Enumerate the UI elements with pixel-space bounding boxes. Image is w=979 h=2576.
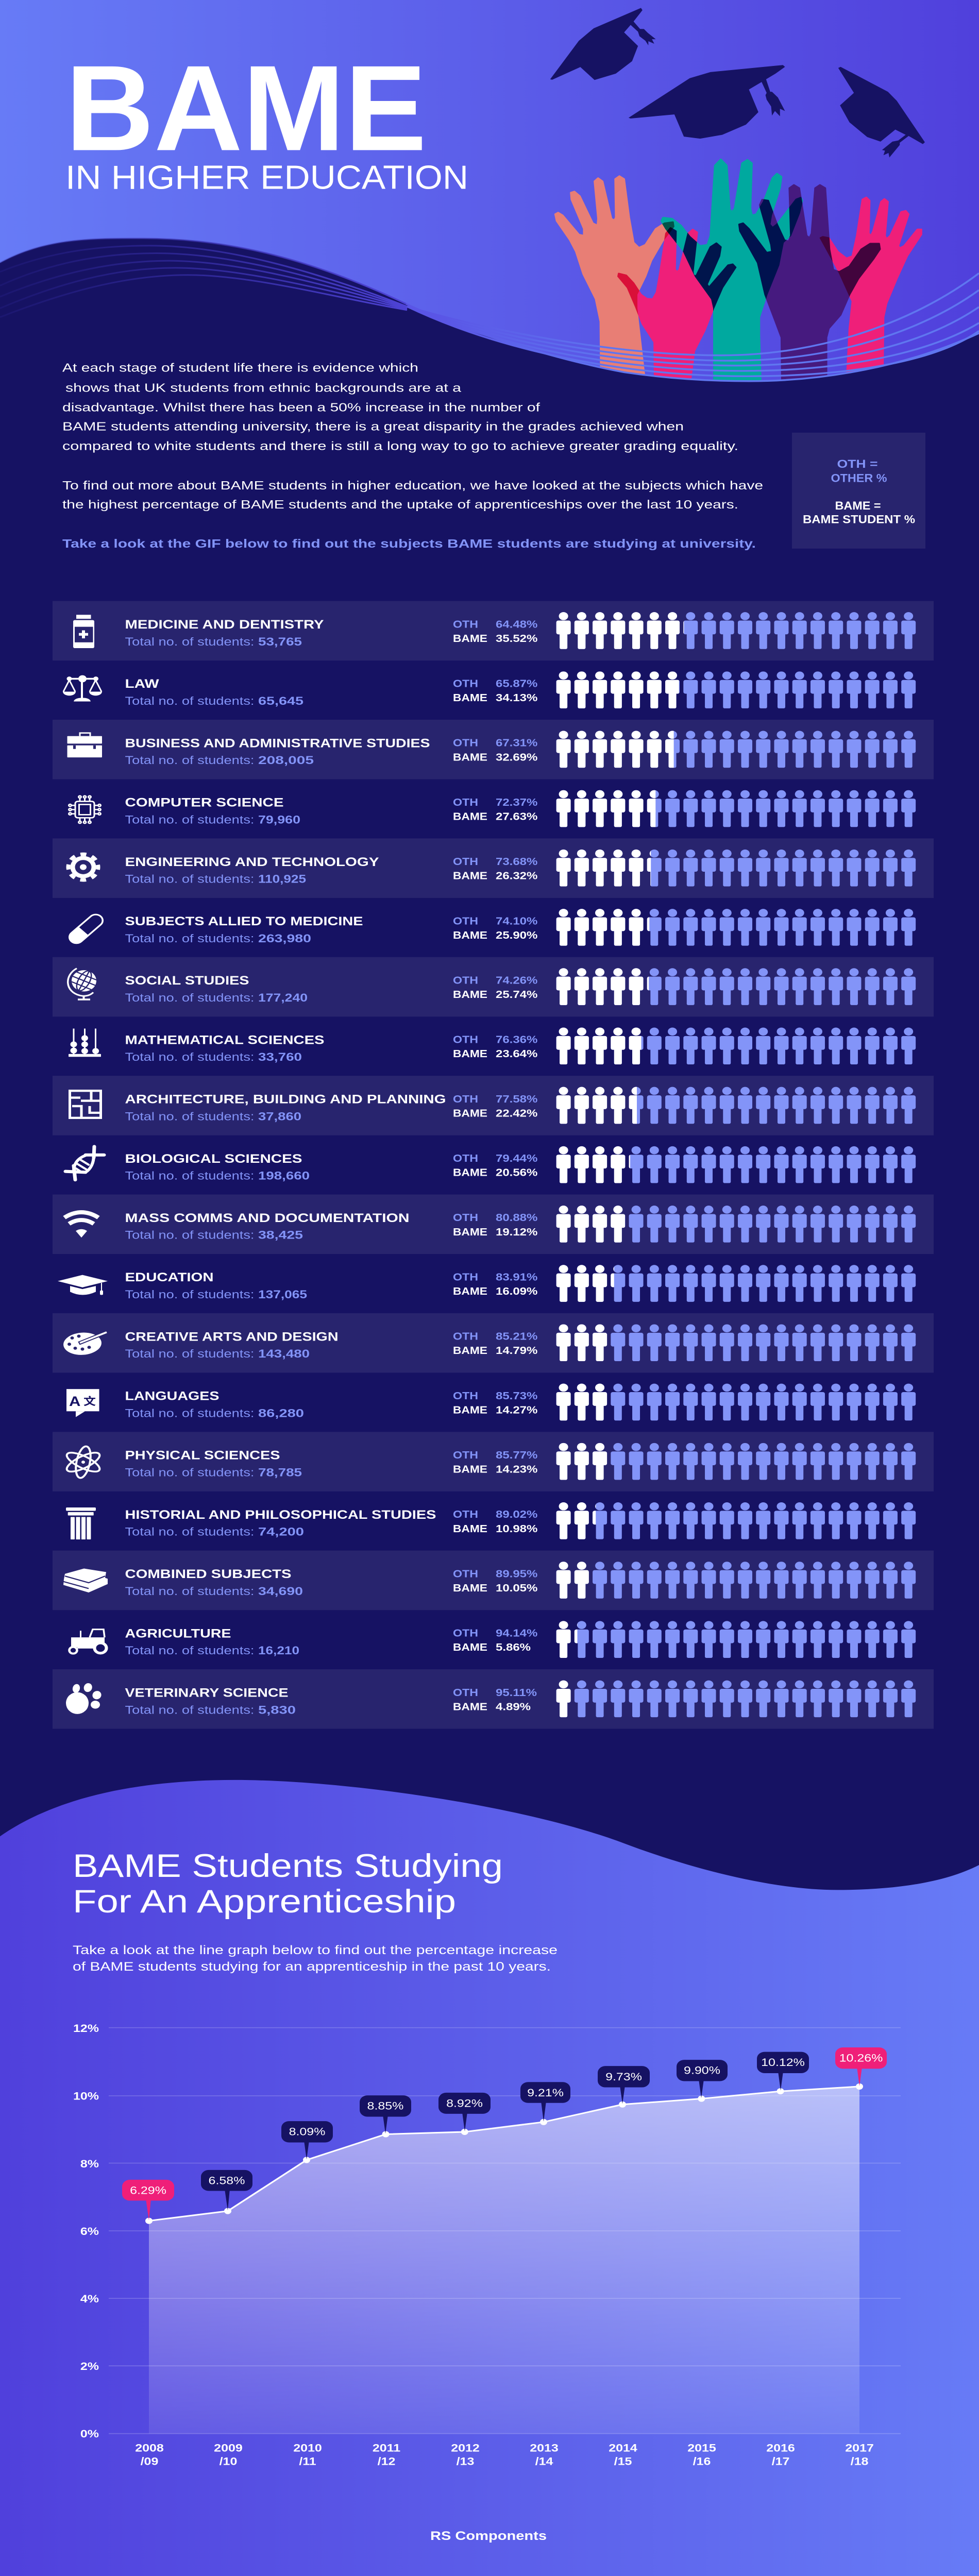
title: IN HIGHER EDUCATION [65, 159, 468, 196]
panel: biological sciences: Total no. of students: [125, 1170, 254, 1182]
panel: law: 65.87% [496, 677, 537, 689]
panel: architecture, building and planning: OTH [453, 1093, 478, 1105]
panel: engineering and technology: OTH [453, 856, 478, 868]
panel: creative arts and design [53, 1313, 934, 1372]
panel: computer science: 79,960 [258, 814, 300, 826]
people chart [556, 1146, 916, 1183]
callout 2009/10 [201, 2170, 252, 2210]
panel: computer science: 27.63% [496, 810, 537, 822]
panel: languages: 14.27% [496, 1404, 537, 1416]
legend panel: OTHER % [831, 472, 887, 485]
panel: education: 16.09% [496, 1285, 537, 1297]
panel: law: Total no. of students: [125, 695, 254, 708]
panel: mathematical sciences [69, 1027, 916, 1064]
panel: veterinary science: 4.89% [496, 1701, 531, 1713]
y axis labels: 10% [73, 2090, 99, 2102]
callout 2013/14 [520, 2082, 570, 2122]
people chart [556, 1087, 916, 1124]
panel: architecture, building and planning: Total no. of students: [125, 1110, 254, 1123]
panel: computer science: 72.37% [496, 796, 537, 808]
panel: mass comms and documentation: Total no. of students: [125, 1229, 254, 1242]
callout 2015/16 [677, 2060, 728, 2098]
y axis labels: 0% [80, 2428, 99, 2440]
panel: subjects allied to medicine: BAME [453, 929, 487, 941]
panel: physical sciences: 14.23% [496, 1463, 537, 1475]
panel: physical sciences: PHYSICAL SCIENCES [125, 1448, 280, 1462]
panel: mass comms and documentation: 38,425 [258, 1229, 303, 1242]
x axis labels: /14 [535, 2455, 553, 2467]
panel: social studies: 74.26% [496, 974, 537, 986]
panel: computer science: Total no. of students: [125, 814, 254, 826]
panel: business and administrative studies: 67.31% [496, 737, 537, 749]
panel: biological sciences [65, 1146, 916, 1183]
icon: graduation cap [58, 1275, 108, 1295]
panel: education: 137,065 [258, 1289, 307, 1301]
panel: medicine and dentistry [53, 601, 934, 660]
panel: biological sciences: BAME [453, 1166, 487, 1178]
panel: business and administrative studies: BUSINESS AND ADMINISTRATIVE STUDIES [125, 736, 430, 750]
icon: abacus [69, 1028, 101, 1057]
panel: medicine and dentistry: Total no. of students: [125, 635, 254, 648]
panel: subjects allied to medicine: 74.10% [496, 915, 537, 927]
panel: languages: 85.73% [496, 1389, 537, 1401]
source credit: RS Components [430, 2529, 547, 2543]
panel: creative arts and design: BAME [453, 1345, 487, 1357]
x axis labels: /15 [614, 2455, 632, 2467]
callout 2011/12 [360, 2095, 411, 2133]
panel: mass comms and documentation [53, 1195, 934, 1254]
panel: computer science: COMPUTER SCIENCE [125, 795, 283, 809]
y axis labels: 12% [73, 2022, 99, 2034]
people chart [556, 1443, 916, 1480]
panel: computer science [69, 790, 916, 827]
panel: business and administrative studies [53, 720, 934, 779]
people chart [556, 1027, 916, 1064]
x axis labels: 2008 [135, 2442, 164, 2454]
panel: agriculture: 16,210 [258, 1645, 299, 1657]
panel: creative arts and design: OTH [453, 1330, 478, 1342]
intro text: Take a look at the GIF below to find out the subjects BAME students are studying at university. [62, 537, 756, 551]
callout 2008/09 [122, 2180, 174, 2220]
panel: engineering and technology: 110,925 [258, 873, 306, 886]
legend panel: BAME STUDENT % [803, 513, 915, 526]
panel: historial and philosophical studies: OTH [453, 1509, 478, 1520]
panel: agriculture: Total no. of students: [125, 1645, 254, 1657]
callout 2015/16: 9.90% [684, 2064, 720, 2076]
panel: subjects allied to medicine: Total no. of students: [125, 932, 254, 945]
panel: engineering and technology [53, 838, 934, 898]
panel: agriculture: AGRICULTURE [125, 1626, 231, 1640]
panel: physical sciences: Total no. of students: [125, 1466, 254, 1479]
y axis labels: 4% [80, 2292, 99, 2304]
panel: mass comms and documentation: 80.88% [496, 1212, 537, 1224]
panel: veterinary science: Total no. of students: [125, 1704, 254, 1717]
x axis labels: 2017 [845, 2442, 874, 2454]
callout 2014/15: 9.73% [605, 2070, 642, 2082]
intro text: shows that UK students from ethnic backgrounds are at a [65, 381, 462, 395]
icon: medicine bottle [73, 615, 94, 648]
people chart [556, 731, 916, 768]
panel: agriculture: BAME [453, 1641, 487, 1653]
people chart [556, 850, 916, 886]
panel: architecture, building and planning [53, 1076, 934, 1136]
panel: languages: LANGUAGES [125, 1388, 219, 1403]
panel: mathematical sciences: 23.64% [496, 1048, 537, 1060]
panel: veterinary science: BAME [453, 1701, 487, 1713]
icon: paw print [66, 1683, 103, 1714]
section intro text: Take a look at the line graph below to find out the percentage increase [73, 1943, 558, 1957]
panel: computer science: OTH [453, 796, 478, 808]
x axis labels: /17 [772, 2455, 789, 2467]
panel: medicine and dentistry: 35.52% [496, 632, 537, 645]
panel: combined subjects: 34,690 [258, 1585, 303, 1598]
people chart [556, 1324, 916, 1361]
icon: raised hands [555, 159, 921, 385]
panel: agriculture: OTH [453, 1627, 478, 1639]
panel: subjects allied to medicine: SUBJECTS ALLIED TO MEDICINE [125, 914, 363, 928]
intro text: BAME students attending university, there is a great disparity in the grades achieved when [62, 420, 684, 433]
callout 2010/11: 8.09% [289, 2125, 325, 2138]
icon: globe [67, 967, 100, 1001]
panel: subjects allied to medicine: OTH [453, 915, 478, 927]
icon: translate bubble [66, 1389, 99, 1417]
panel: biological sciences: 198,660 [258, 1170, 310, 1182]
panel: languages: 86,280 [258, 1407, 304, 1420]
callout 2010/11 [281, 2121, 333, 2159]
panel: social studies: SOCIAL STUDIES [125, 973, 249, 988]
people chart [556, 1206, 916, 1243]
panel: social studies: 177,240 [258, 992, 308, 1004]
y axis labels: 6% [80, 2225, 99, 2237]
panel: social studies: Total no. of students: [125, 992, 254, 1004]
icon: column [66, 1507, 96, 1539]
panel: social studies [53, 957, 934, 1016]
people chart [556, 1562, 916, 1599]
panel: business and administrative studies: 32.69% [496, 751, 537, 763]
panel: engineering and technology: 73.68% [496, 856, 537, 868]
intro text: To find out more about BAME students in higher education, we have looked at the subjects which have [62, 479, 763, 493]
intro text: disadvantage. Whilst there has been a 50% increase in the number of [62, 401, 541, 414]
callout 2013/14: 9.21% [527, 2086, 564, 2098]
panel: creative arts and design: CREATIVE ARTS AND DESIGN [125, 1329, 338, 1344]
panel: engineering and technology: 26.32% [496, 870, 537, 882]
icon: translate bubble: A [69, 1394, 80, 1409]
panel: mass comms and documentation: OTH [453, 1212, 478, 1224]
panel: mass comms and documentation: 19.12% [496, 1226, 537, 1238]
x axis labels: 2015 [687, 2442, 716, 2454]
panel: agriculture: 94.14% [496, 1627, 537, 1639]
x axis labels: 2010 [293, 2442, 322, 2454]
icon: painter palette [62, 1331, 107, 1356]
panel: creative arts and design: 143,480 [258, 1348, 310, 1361]
panel: combined subjects: 10.05% [496, 1582, 537, 1594]
panel: mass comms and documentation: BAME [453, 1226, 487, 1238]
panel: education: BAME [453, 1285, 487, 1297]
panel: creative arts and design: 14.79% [496, 1345, 537, 1357]
panel: mathematical sciences: OTH [453, 1033, 478, 1045]
panel: historial and philosophical studies [66, 1502, 916, 1539]
panel: mathematical sciences: 76.36% [496, 1033, 537, 1045]
icon: capsule [65, 911, 106, 946]
icon: dna helix [65, 1146, 104, 1180]
panel: historial and philosophical studies: BAME [453, 1522, 487, 1534]
panel: mathematical sciences: BAME [453, 1048, 487, 1060]
title: BAME [65, 40, 427, 176]
panel: physical sciences: 78,785 [258, 1466, 302, 1479]
icon: briefcase [67, 733, 102, 757]
panel: creative arts and design: 85.21% [496, 1330, 537, 1342]
people chart [556, 671, 916, 708]
icon: floor plan maze [70, 1091, 102, 1118]
y axis labels: 8% [80, 2157, 99, 2170]
panel: historial and philosophical studies: 89.02% [496, 1509, 537, 1520]
panel: engineering and technology: BAME [453, 870, 487, 882]
panel: mathematical sciences: MATHEMATICAL SCIENCES [125, 1032, 325, 1047]
panel: engineering and technology: ENGINEERING AND TECHNOLOGY [125, 855, 379, 869]
panel: social studies: BAME [453, 989, 487, 1001]
panel: veterinary science: VETERINARY SCIENCE [125, 1685, 289, 1700]
panel: languages: Total no. of students: [125, 1407, 254, 1420]
apprenticeship section background wave [0, 1780, 979, 2576]
people chart [556, 1621, 916, 1658]
panel: architecture, building and planning: BAME [453, 1107, 487, 1119]
panel: biological sciences: OTH [453, 1153, 478, 1164]
x axis labels: 2012 [451, 2442, 480, 2454]
wave contour lines across the hands [406, 273, 979, 381]
panel: biological sciences: 79.44% [496, 1153, 537, 1164]
panel: medicine and dentistry: BAME [453, 632, 487, 645]
panel: biological sciences: 20.56% [496, 1166, 537, 1178]
x axis labels: /09 [141, 2455, 158, 2467]
callout 2012/13 [438, 2093, 491, 2131]
y axis labels: 2% [80, 2360, 99, 2372]
people chart [556, 1384, 916, 1420]
callout 2009/10: 6.58% [209, 2174, 245, 2187]
panel: mathematical sciences: Total no. of students: [125, 1051, 254, 1064]
x axis labels: /12 [378, 2455, 395, 2467]
panel: medicine and dentistry: OTH [453, 618, 478, 630]
panel: mass comms and documentation: MASS COMMS AND DOCUMENTATION [125, 1211, 409, 1225]
icon: scales [63, 675, 102, 701]
panel: veterinary science: OTH [453, 1686, 478, 1698]
intro text: At each stage of student life there is evidence which [62, 361, 418, 375]
panel: physical sciences: 85.77% [496, 1449, 537, 1461]
people chart [556, 790, 916, 827]
area under line [149, 2087, 859, 2434]
callout 2014/15 [598, 2066, 650, 2104]
panel: education: OTH [453, 1271, 478, 1283]
icon: gear [68, 854, 98, 880]
panel: law: LAW [125, 676, 159, 691]
legend panel: OTH = [837, 458, 877, 470]
legend panel: BAME = [835, 500, 881, 513]
callout 2016/17: 10.12% [761, 2056, 805, 2069]
x axis labels: /13 [457, 2455, 474, 2467]
panel: creative arts and design: Total no. of students: [125, 1348, 254, 1361]
icon: graduation caps [550, 8, 925, 158]
x axis labels: 2016 [766, 2442, 795, 2454]
section heading: For An Apprenticeship [73, 1884, 456, 1920]
panel: law: 34.13% [496, 692, 537, 704]
icon: microchip [69, 796, 101, 823]
panel: medicine and dentistry: 53,765 [258, 635, 302, 648]
panel: education [58, 1265, 916, 1302]
callout 2011/12: 8.85% [367, 2099, 403, 2112]
panel: historial and philosophical studies: 10.98% [496, 1522, 537, 1534]
people chart [556, 612, 916, 649]
intro text [62, 361, 763, 551]
panel: medicine and dentistry: 64.48% [496, 618, 537, 630]
x axis labels: /10 [220, 2455, 237, 2467]
panel: architecture, building and planning: 77.58% [496, 1093, 537, 1105]
panel: business and administrative studies: 208,005 [258, 754, 314, 767]
panel: medicine and dentistry: MEDICINE AND DENTISTRY [125, 617, 324, 632]
icon: atom [64, 1445, 103, 1479]
x axis labels: /18 [851, 2455, 868, 2467]
callout 2017/18 [835, 2047, 887, 2086]
panel: computer science: BAME [453, 810, 487, 822]
panel: veterinary science: 5,830 [258, 1704, 296, 1717]
panel: subjects allied to medicine: 263,980 [258, 932, 311, 945]
panel: agriculture [69, 1621, 916, 1658]
panel: social studies: 25.74% [496, 989, 537, 1001]
panel: social studies: OTH [453, 974, 478, 986]
section intro text: of BAME students studying for an apprenticeship in the past 10 years. [73, 1959, 551, 1973]
panel: physical sciences [53, 1432, 934, 1492]
panel: architecture, building and planning: 37,860 [258, 1110, 301, 1123]
panel: law: BAME [453, 692, 487, 704]
panel: education: 83.91% [496, 1271, 537, 1283]
line chart [73, 2022, 901, 2467]
panel: subjects allied to medicine: 25.90% [496, 929, 537, 941]
panel: biological sciences: BIOLOGICAL SCIENCES [125, 1151, 302, 1165]
intro text: the highest percentage of BAME students and the uptake of apprenticeships over the last 10 years. [62, 498, 738, 512]
panel: mathematical sciences: 33,760 [258, 1051, 302, 1064]
panel: business and administrative studies: BAME [453, 751, 487, 763]
section heading: BAME Students Studying [73, 1848, 503, 1884]
panel: languages: OTH [453, 1389, 478, 1401]
x axis labels: 2014 [609, 2442, 637, 2454]
panel: combined subjects: COMBINED SUBJECTS [125, 1567, 292, 1581]
panel: law [63, 671, 916, 708]
panel: agriculture: 5.86% [496, 1641, 531, 1653]
x axis labels: 2013 [530, 2442, 559, 2454]
x axis labels: /16 [693, 2455, 711, 2467]
panel: business and administrative studies: OTH [453, 737, 478, 749]
x axis labels: /11 [299, 2455, 316, 2467]
panel: education: Total no. of students: [125, 1289, 254, 1301]
panel: veterinary science [53, 1669, 934, 1729]
panel: education: EDUCATION [125, 1270, 213, 1284]
panel: languages: BAME [453, 1404, 487, 1416]
panel: historial and philosophical studies: Total no. of students: [125, 1526, 254, 1538]
icon: tractor [69, 1630, 106, 1654]
people chart [556, 968, 916, 1005]
panel: law: OTH [453, 677, 478, 689]
grid lines [109, 2028, 901, 2434]
people chart [556, 1681, 916, 1717]
panel: combined subjects [53, 1551, 934, 1610]
callout 2016/17 [757, 2052, 809, 2091]
hero navy wave [0, 239, 979, 488]
x axis labels: 2011 [373, 2442, 400, 2454]
panel: subjects allied to medicine [65, 909, 916, 946]
people chart [556, 909, 916, 946]
intro text: compared to white students and there is still a long way to go to achieve greater grading equality. [62, 439, 738, 453]
panel: veterinary science: 95.11% [496, 1686, 537, 1698]
panel: architecture, building and planning: ARCHITECTURE, BUILDING AND PLANNING [125, 1092, 446, 1106]
panel: historial and philosophical studies: 74,200 [258, 1526, 304, 1538]
x axis labels [135, 2442, 874, 2467]
panel: combined subjects: OTH [453, 1568, 478, 1580]
panel: law: 65,645 [258, 695, 303, 708]
wave contour lines on the left [0, 239, 407, 317]
x axis labels: 2009 [214, 2442, 243, 2454]
people chart [556, 1265, 916, 1302]
people chart [556, 1502, 916, 1539]
icon: translate bubble: 文 [83, 1396, 96, 1408]
icon: stack of books [63, 1568, 108, 1592]
panel: historial and philosophical studies: HISTORIAL AND PHILOSOPHICAL STUDIES [125, 1507, 436, 1521]
y axis labels [73, 2022, 99, 2440]
callout 2008/09: 6.29% [130, 2184, 166, 2196]
section intro text [73, 1943, 558, 1973]
callout 2012/13: 8.92% [446, 2097, 483, 2109]
panel: combined subjects: Total no. of students: [125, 1585, 254, 1598]
legend panel [792, 433, 925, 549]
section heading [73, 1848, 503, 1920]
hero gradient background [0, 0, 979, 444]
data points [145, 2083, 863, 2224]
panel: combined subjects: BAME [453, 1582, 487, 1594]
panel: business and administrative studies: Total no. of students: [125, 754, 254, 767]
panel: physical sciences: OTH [453, 1449, 478, 1461]
data line [149, 2087, 859, 2221]
panel: languages [66, 1384, 916, 1420]
panel: combined subjects: 89.95% [496, 1568, 537, 1580]
callout 2017/18: 10.26% [839, 2052, 883, 2064]
panel: engineering and technology: Total no. of students: [125, 873, 254, 886]
icon: wifi [64, 1212, 98, 1238]
panel: physical sciences: BAME [453, 1463, 487, 1475]
panel: architecture, building and planning: 22.42% [496, 1107, 537, 1119]
